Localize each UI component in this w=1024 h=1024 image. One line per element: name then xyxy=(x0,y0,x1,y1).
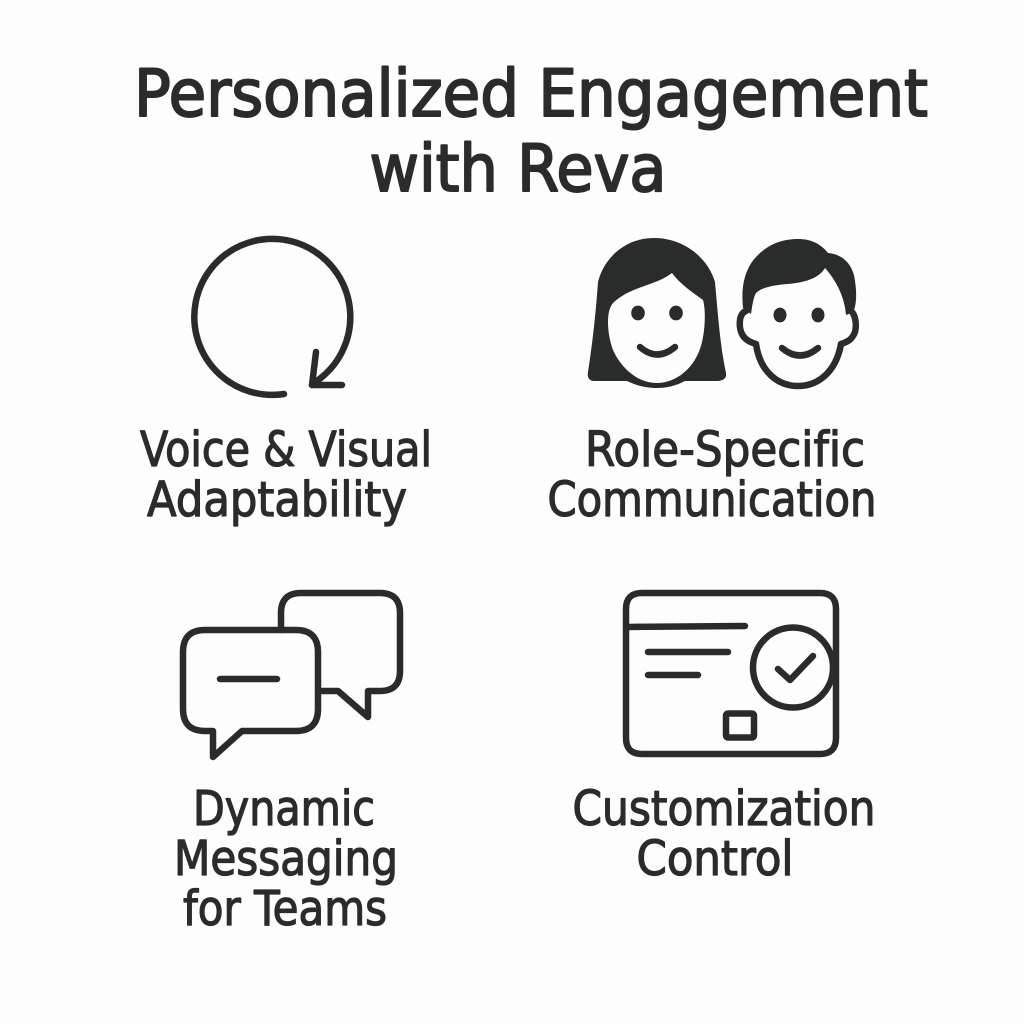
title xyxy=(134,57,928,207)
label: voice and visual xyxy=(140,422,432,528)
label: customization control xyxy=(572,781,876,887)
label: voice and visual: Adaptability xyxy=(147,472,407,528)
icon: settings window with check xyxy=(626,593,836,754)
panel: voice and visual adaptability xyxy=(140,239,432,528)
icon: circular arrow xyxy=(194,239,350,395)
panel: customization control xyxy=(572,593,876,887)
icon: man face xyxy=(740,239,856,386)
title: with Reva xyxy=(370,132,666,207)
panel: role-specific communication xyxy=(548,238,876,528)
label: dynamic messaging for teams: Dynamic xyxy=(193,781,375,837)
label: customization control: Control xyxy=(636,831,794,887)
icon: two faces xyxy=(588,238,856,388)
label: role-specific communication xyxy=(548,422,876,528)
label: dynamic messaging for teams: Messaging xyxy=(174,831,398,887)
label: role-specific communication: Role-Specific xyxy=(585,422,865,478)
icon: chat bubbles xyxy=(183,593,400,757)
title: Personalized Engagement xyxy=(134,57,928,132)
label: role-specific communication: Communication xyxy=(548,472,876,528)
label: voice and visual: Voice & Visual xyxy=(140,422,432,478)
label: dynamic messaging for teams: for Teams xyxy=(183,881,387,937)
panel: dynamic messaging for teams xyxy=(174,593,400,937)
label: customization control: Customization xyxy=(572,781,876,837)
label: dynamic messaging for teams xyxy=(174,781,398,937)
icon: woman face xyxy=(588,238,726,388)
